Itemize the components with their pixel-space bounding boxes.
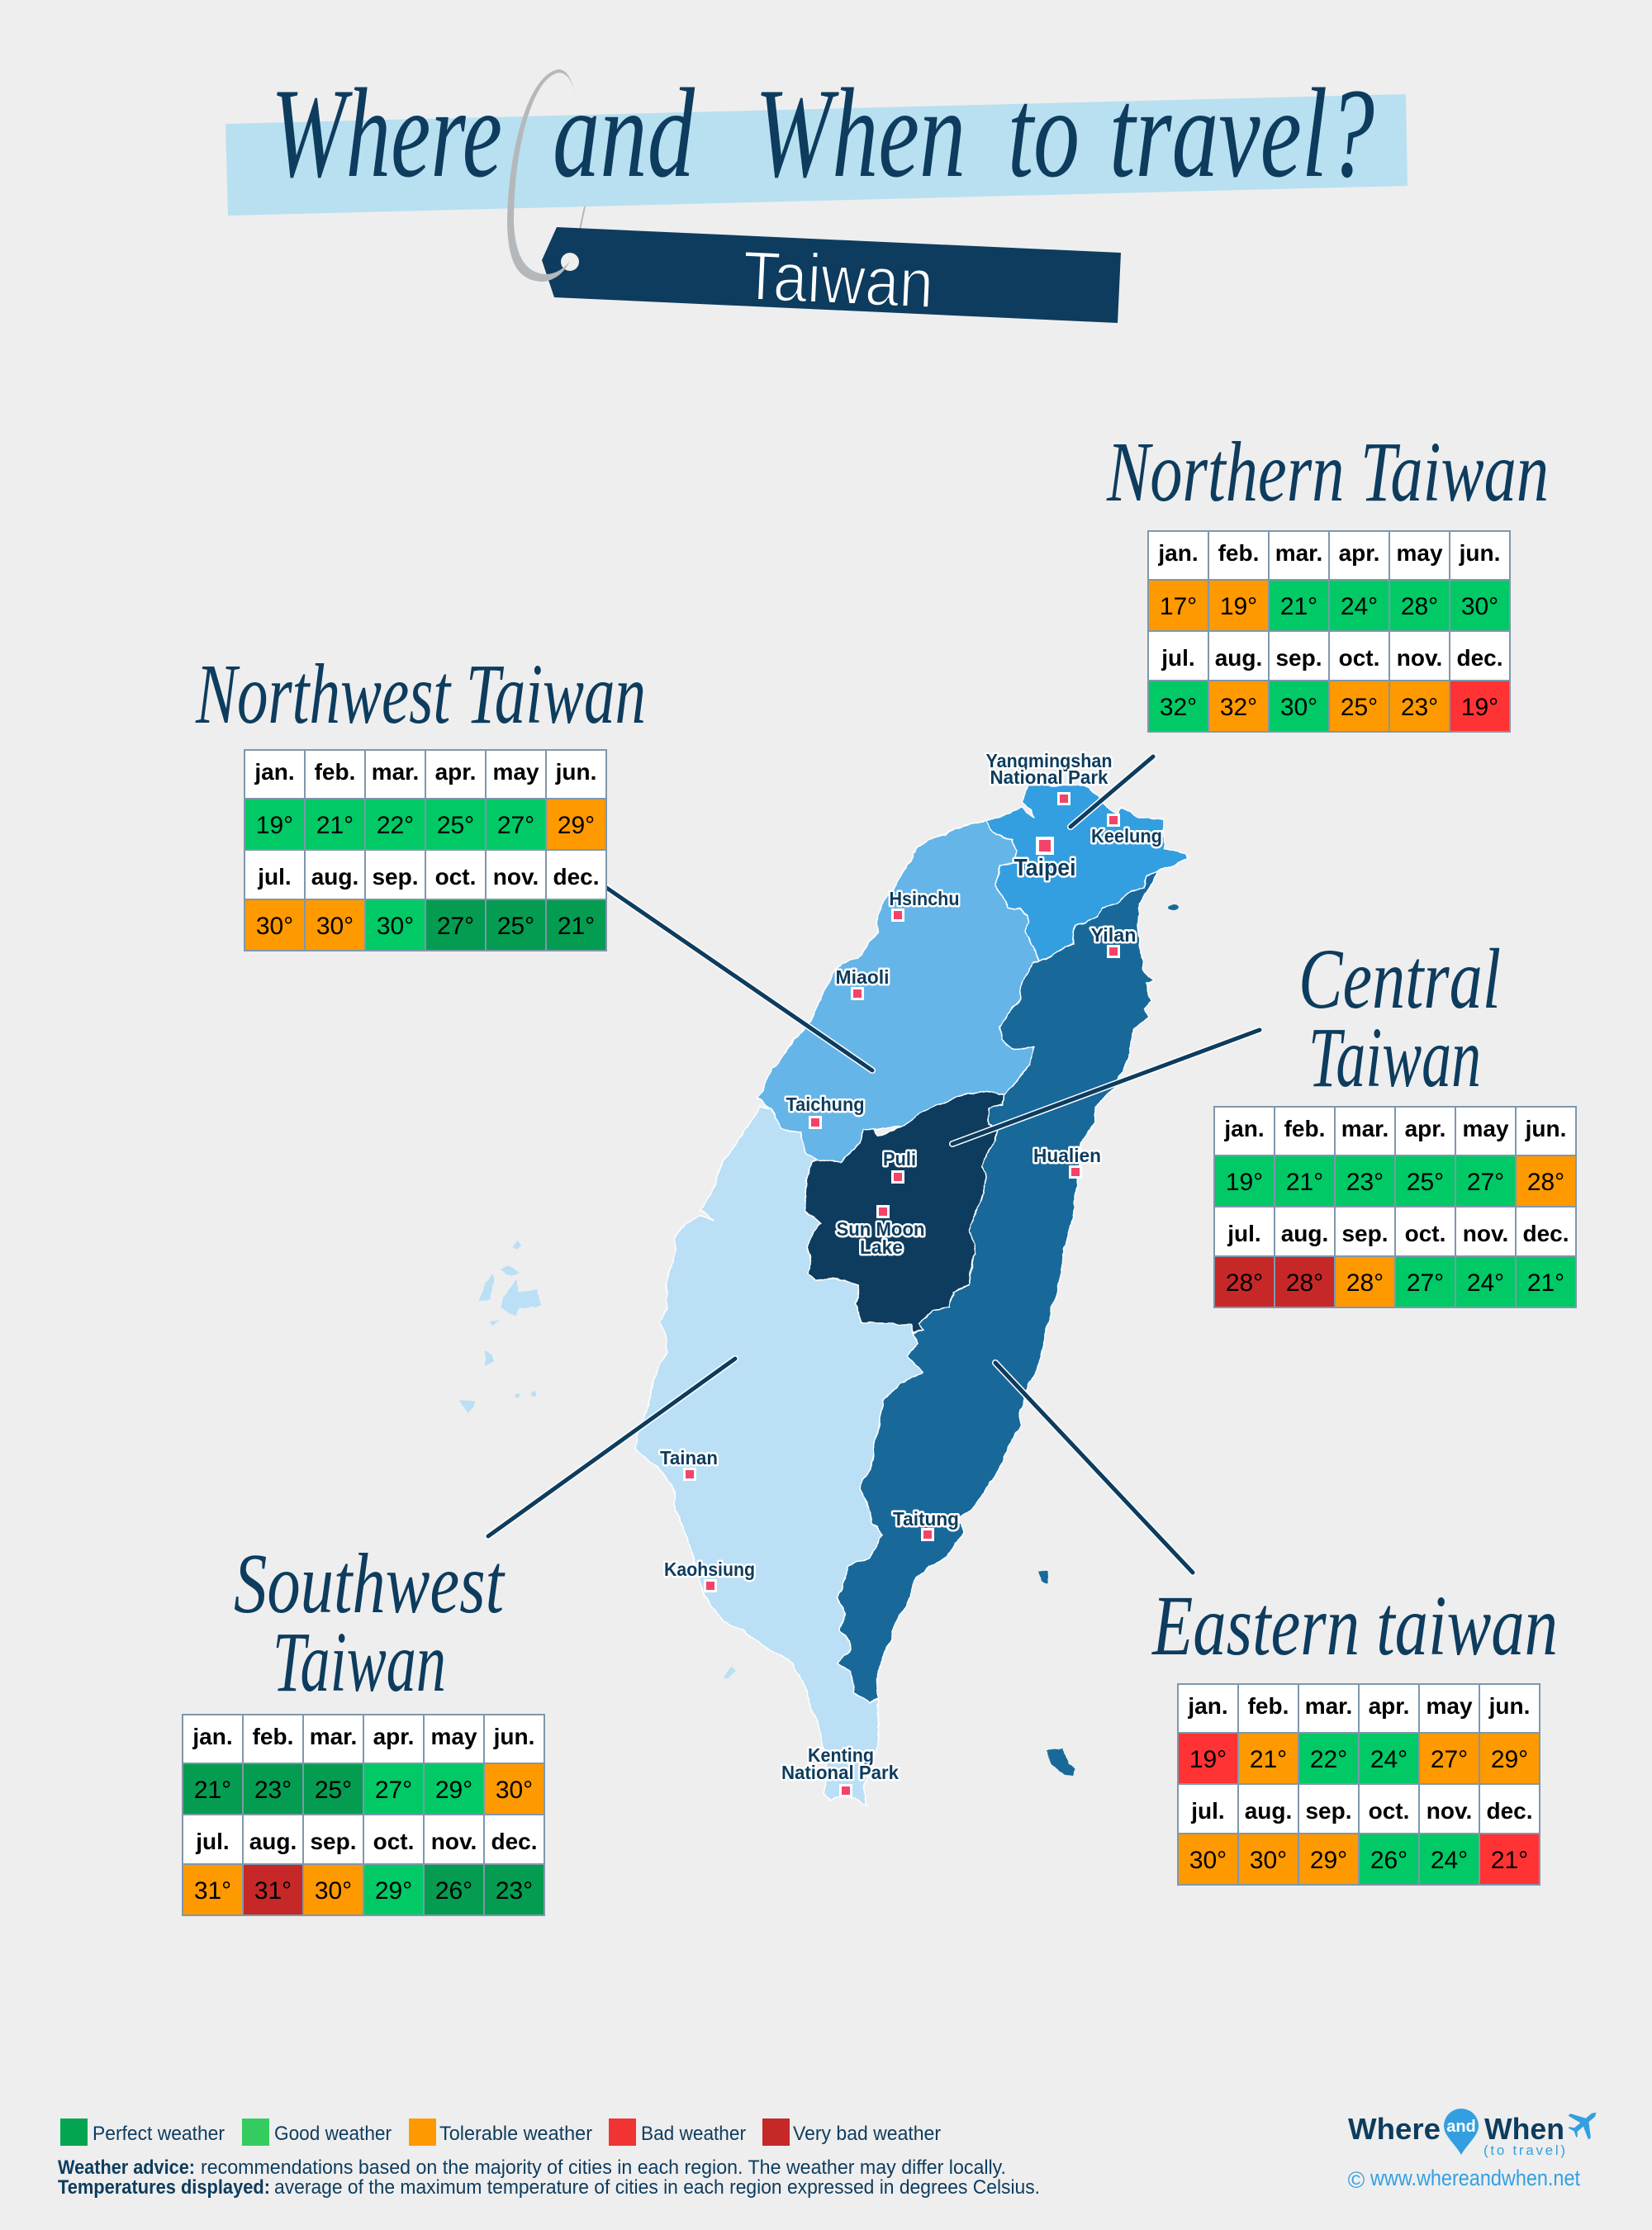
city: Miaoli bbox=[836, 966, 889, 1000]
table: Northwest Taiwan temperatures: sep. bbox=[372, 864, 419, 890]
table: Northwest Taiwan temperatures bbox=[244, 750, 606, 951]
legend item: bad weather bbox=[609, 2118, 746, 2146]
table: Southwest Taiwan temperatures: 21° bbox=[194, 1777, 231, 1804]
city: Sun Moon Lake: Sun Moon bbox=[836, 1218, 925, 1240]
city: Sun Moon Lake: Lake bbox=[860, 1236, 903, 1258]
city: Sun Moon Lake bbox=[836, 1205, 925, 1258]
table: Central Taiwan temperatures: 27° bbox=[1467, 1169, 1504, 1196]
table: Northern Taiwan temperatures: 28° bbox=[1401, 593, 1438, 620]
table: Central Taiwan temperatures: 28° bbox=[1226, 1269, 1263, 1297]
leader line: central Taiwan bbox=[952, 1030, 1260, 1144]
table: Southwest Taiwan temperatures: dec. bbox=[491, 1829, 538, 1854]
table: Central Taiwan temperatures: 21° bbox=[1286, 1169, 1323, 1196]
table: Central Taiwan temperatures: 21° bbox=[1527, 1269, 1564, 1297]
table: Southwest Taiwan temperatures: jul. bbox=[195, 1829, 230, 1854]
heading: Southwest Taiwan: Southwest bbox=[234, 1536, 506, 1631]
legend item: tolerable weather: Tolerable weather bbox=[439, 2123, 592, 2145]
table: Northwest Taiwan temperatures: 21° bbox=[316, 812, 354, 839]
table: Central Taiwan temperatures: 28° bbox=[1286, 1269, 1323, 1297]
table: Central Taiwan temperatures bbox=[1214, 1107, 1576, 1307]
city: Tainan: Tainan bbox=[660, 1447, 718, 1468]
city: Taipei: Taipei bbox=[1014, 855, 1075, 881]
table: Eastern Taiwan temperatures: 29° bbox=[1491, 1746, 1528, 1773]
table: Northern Taiwan temperatures: dec. bbox=[1456, 645, 1503, 671]
table: Northwest Taiwan temperatures: nov. bbox=[493, 864, 539, 890]
heading: Southwest Taiwan bbox=[234, 1536, 506, 1710]
table: Northwest Taiwan temperatures: 27° bbox=[437, 913, 474, 940]
table: Central Taiwan temperatures: 24° bbox=[1467, 1269, 1504, 1297]
islands: Penghu and Liuqiu bbox=[459, 1241, 736, 1679]
table: Eastern Taiwan temperatures: 19° bbox=[1189, 1746, 1227, 1773]
city: Yilan: Yilan bbox=[1090, 924, 1137, 946]
table: Southwest Taiwan temperatures: oct. bbox=[373, 1829, 414, 1854]
website credit: www.whereandwhen.net bbox=[1370, 2166, 1580, 2190]
city: Kaohsiung: Kaohsiung bbox=[664, 1559, 755, 1580]
city: Yangmingshan National Park bbox=[986, 750, 1112, 805]
panel: Eastern Taiwan bbox=[1151, 1578, 1558, 1885]
table: Central Taiwan temperatures: nov. bbox=[1463, 1221, 1508, 1246]
city: Taipei bbox=[1014, 837, 1075, 881]
table: Northwest Taiwan temperatures: 22° bbox=[377, 812, 414, 839]
logo: Where and When to travel: When bbox=[1484, 2112, 1564, 2146]
table: Northern Taiwan temperatures: 23° bbox=[1401, 694, 1438, 721]
table: Northwest Taiwan temperatures: 25° bbox=[497, 913, 534, 940]
table: Central Taiwan temperatures: may bbox=[1462, 1116, 1509, 1141]
title bbox=[271, 62, 1374, 204]
islands: Green Island, Orchid Island, Turtle Island bbox=[1037, 905, 1177, 1776]
table: Northern Taiwan temperatures: nov. bbox=[1397, 645, 1442, 671]
logo: Where and When to travel: and bbox=[1446, 2118, 1476, 2136]
region: northwest Taiwan bbox=[757, 820, 1039, 1163]
city: Hsinchu: Hsinchu bbox=[889, 888, 960, 909]
table: Central Taiwan temperatures: oct. bbox=[1405, 1221, 1446, 1246]
table: Northwest Taiwan temperatures: 25° bbox=[437, 812, 474, 839]
table: Southwest Taiwan temperatures: aug. bbox=[249, 1829, 297, 1854]
panel: Northern Taiwan bbox=[1106, 425, 1549, 732]
table: Northern Taiwan temperatures: 19° bbox=[1461, 694, 1498, 721]
table: Central Taiwan temperatures: jul. bbox=[1227, 1221, 1261, 1246]
table: Eastern Taiwan temperatures: may bbox=[1426, 1693, 1473, 1719]
tag with country name: Taiwan bbox=[741, 236, 935, 322]
table: Central Taiwan temperatures: 25° bbox=[1407, 1169, 1444, 1196]
tag string behind bbox=[580, 206, 585, 230]
region: central Taiwan bbox=[805, 1091, 1004, 1334]
table: Southwest Taiwan temperatures: 30° bbox=[496, 1777, 533, 1804]
table: Eastern Taiwan temperatures: 26° bbox=[1370, 1847, 1408, 1874]
table: Northern Taiwan temperatures: 19° bbox=[1220, 593, 1257, 620]
city: Yangmingshan National Park: Yangmingshan bbox=[986, 750, 1112, 771]
table: Eastern Taiwan temperatures: 21° bbox=[1250, 1746, 1287, 1773]
table: Southwest Taiwan temperatures: 30° bbox=[315, 1877, 352, 1905]
table: Northwest Taiwan temperatures: jun. bbox=[555, 759, 596, 785]
table: Northern Taiwan temperatures: jan. bbox=[1157, 540, 1199, 566]
table: Northern Taiwan temperatures: 30° bbox=[1461, 593, 1498, 620]
table: Central Taiwan temperatures: aug. bbox=[1281, 1221, 1328, 1246]
panel: Southwest Taiwan bbox=[183, 1536, 544, 1915]
table: Northern Taiwan temperatures: 32° bbox=[1160, 694, 1197, 721]
map of Taiwan bbox=[459, 785, 1189, 1806]
table: Eastern Taiwan temperatures: 30° bbox=[1250, 1847, 1287, 1874]
city: Keelung bbox=[1091, 814, 1162, 847]
table: Northern Taiwan temperatures: jul. bbox=[1161, 645, 1195, 671]
legend item: very bad weather bbox=[762, 2118, 941, 2146]
table: Northern Taiwan temperatures: may bbox=[1396, 540, 1443, 566]
table: Central Taiwan temperatures: apr. bbox=[1405, 1116, 1446, 1141]
table: Northwest Taiwan temperatures: may bbox=[492, 759, 539, 785]
table: Southwest Taiwan temperatures: mar. bbox=[310, 1724, 357, 1749]
city: Hualien bbox=[1033, 1145, 1101, 1179]
temperatures note: Temperatures displayed: bbox=[58, 2176, 270, 2199]
table: Northern Taiwan temperatures: 30° bbox=[1280, 694, 1317, 721]
city: Taichung bbox=[786, 1094, 864, 1129]
heading: Central Taiwan: Central bbox=[1298, 932, 1501, 1027]
table: Northwest Taiwan temperatures: 30° bbox=[377, 913, 414, 940]
table: Northern Taiwan temperatures: sep. bbox=[1275, 645, 1322, 671]
table: Central Taiwan temperatures: jan. bbox=[1223, 1116, 1265, 1141]
region: northern Taiwan bbox=[985, 785, 1189, 961]
table: Northern Taiwan temperatures: oct. bbox=[1339, 645, 1379, 671]
table: Southwest Taiwan temperatures: sep. bbox=[310, 1829, 357, 1854]
panel: Central Taiwan bbox=[1214, 932, 1576, 1307]
city: Puli: Puli bbox=[883, 1148, 916, 1170]
title: and bbox=[553, 62, 695, 204]
table: Eastern Taiwan temperatures: 29° bbox=[1310, 1847, 1347, 1874]
website credit: © bbox=[1348, 2167, 1365, 2193]
legend item: tolerable weather bbox=[409, 2118, 592, 2146]
table: Northern Taiwan temperatures bbox=[1148, 531, 1510, 732]
city: Miaoli: Miaoli bbox=[836, 966, 889, 988]
table: Northwest Taiwan temperatures: 30° bbox=[256, 913, 293, 940]
table: Eastern Taiwan temperatures: apr. bbox=[1369, 1693, 1409, 1719]
city: Tainan bbox=[660, 1447, 718, 1481]
tag with country name bbox=[542, 227, 1121, 323]
title: When bbox=[755, 62, 966, 204]
table: Northwest Taiwan temperatures: feb. bbox=[315, 759, 355, 785]
city: Taitung: Taitung bbox=[893, 1508, 959, 1530]
table: Northwest Taiwan temperatures: 27° bbox=[497, 812, 534, 839]
title: travel? bbox=[1109, 62, 1374, 204]
table: Eastern Taiwan temperatures: sep. bbox=[1305, 1798, 1352, 1824]
table: Eastern Taiwan temperatures: 27° bbox=[1431, 1746, 1468, 1773]
table: Eastern Taiwan temperatures: 30° bbox=[1189, 1847, 1227, 1874]
table: Northwest Taiwan temperatures: dec. bbox=[553, 864, 600, 890]
city: Kenting National Park bbox=[781, 1744, 899, 1797]
region: southwest Taiwan bbox=[634, 1106, 923, 1806]
table: Central Taiwan temperatures: 28° bbox=[1346, 1269, 1384, 1297]
table: Eastern Taiwan temperatures: mar. bbox=[1305, 1693, 1352, 1719]
table: Southwest Taiwan temperatures: nov. bbox=[431, 1829, 477, 1854]
table: Southwest Taiwan temperatures: 27° bbox=[375, 1777, 412, 1804]
city: Hualien: Hualien bbox=[1033, 1145, 1101, 1166]
leader line: southwest Taiwan bbox=[488, 1359, 735, 1536]
table: Southwest Taiwan temperatures: 25° bbox=[315, 1777, 352, 1804]
table: Northern Taiwan temperatures: aug. bbox=[1215, 645, 1262, 671]
table: Eastern Taiwan temperatures: jun. bbox=[1488, 1693, 1530, 1719]
city: Keelung: Keelung bbox=[1091, 825, 1162, 847]
region: eastern Taiwan bbox=[838, 865, 1174, 1702]
leader line: northern Taiwan bbox=[1070, 757, 1153, 827]
table: Northern Taiwan temperatures: 17° bbox=[1160, 593, 1197, 620]
table: Central Taiwan temperatures: sep. bbox=[1341, 1221, 1389, 1246]
city: Hsinchu bbox=[889, 888, 960, 922]
legend bbox=[60, 2118, 941, 2146]
heading: Central Taiwan: Taiwan bbox=[1308, 1010, 1481, 1105]
legend item: bad weather: Bad weather bbox=[641, 2123, 746, 2145]
heading: Central Taiwan bbox=[1298, 932, 1501, 1105]
city: Puli bbox=[883, 1148, 916, 1184]
city: Kaohsiung bbox=[664, 1559, 755, 1592]
table: Northwest Taiwan temperatures: 19° bbox=[256, 812, 293, 839]
temperatures note: average of the maximum temperature of cities in each region expressed in degrees Celsius. bbox=[274, 2176, 1040, 2199]
table: Southwest Taiwan temperatures: may bbox=[430, 1724, 477, 1749]
title: to bbox=[1008, 62, 1080, 204]
logo: Where and When to travel: Where bbox=[1348, 2112, 1441, 2146]
legend item: perfect weather bbox=[60, 2118, 225, 2146]
table: Northern Taiwan temperatures: mar. bbox=[1275, 540, 1322, 566]
table: Northwest Taiwan temperatures: jul. bbox=[257, 864, 292, 890]
table: Eastern Taiwan temperatures bbox=[1178, 1684, 1540, 1885]
city: Yangmingshan National Park: National Park bbox=[990, 766, 1108, 788]
table: Eastern Taiwan temperatures: 22° bbox=[1310, 1746, 1347, 1773]
table: Central Taiwan temperatures: mar. bbox=[1341, 1116, 1389, 1141]
table: Southwest Taiwan temperatures bbox=[183, 1715, 544, 1915]
table: Eastern Taiwan temperatures: aug. bbox=[1245, 1798, 1292, 1824]
table: Southwest Taiwan temperatures: 31° bbox=[194, 1877, 231, 1905]
table: Southwest Taiwan temperatures: jan. bbox=[192, 1724, 233, 1749]
city: Taichung: Taichung bbox=[786, 1094, 864, 1115]
table: Eastern Taiwan temperatures: jul. bbox=[1190, 1798, 1225, 1824]
table: Central Taiwan temperatures: dec. bbox=[1522, 1221, 1569, 1246]
city: Yilan bbox=[1090, 924, 1137, 958]
table: Northwest Taiwan temperatures: apr. bbox=[435, 759, 476, 785]
city: Taitung bbox=[893, 1508, 959, 1541]
table: Central Taiwan temperatures: feb. bbox=[1284, 1116, 1325, 1141]
panel: Northwest Taiwan bbox=[195, 647, 646, 951]
table: Central Taiwan temperatures: jun. bbox=[1525, 1116, 1566, 1141]
table: Eastern Taiwan temperatures: nov. bbox=[1427, 1798, 1472, 1824]
table: Northern Taiwan temperatures: 32° bbox=[1220, 694, 1257, 721]
table: Northwest Taiwan temperatures: mar. bbox=[372, 759, 419, 785]
table: Northern Taiwan temperatures: feb. bbox=[1218, 540, 1259, 566]
table: Southwest Taiwan temperatures: 29° bbox=[435, 1777, 472, 1804]
table: Central Taiwan temperatures: 23° bbox=[1346, 1169, 1384, 1196]
leader line: eastern Taiwan bbox=[995, 1363, 1193, 1573]
legend item: good weather bbox=[242, 2118, 392, 2146]
table: Northern Taiwan temperatures: 25° bbox=[1341, 694, 1378, 721]
table: Eastern Taiwan temperatures: 24° bbox=[1431, 1847, 1468, 1874]
leader line: northwest Taiwan bbox=[605, 887, 872, 1070]
table: Northwest Taiwan temperatures: jan. bbox=[254, 759, 295, 785]
table: Southwest Taiwan temperatures: 23° bbox=[496, 1877, 533, 1905]
table: Southwest Taiwan temperatures: apr. bbox=[373, 1724, 414, 1749]
table: Southwest Taiwan temperatures: 26° bbox=[435, 1877, 472, 1905]
title: Where bbox=[271, 62, 502, 204]
table: Southwest Taiwan temperatures: 29° bbox=[375, 1877, 412, 1905]
legend item: perfect weather: Perfect weather bbox=[93, 2123, 225, 2145]
table: Northwest Taiwan temperatures: 29° bbox=[558, 812, 595, 839]
title banner bbox=[225, 94, 1408, 216]
weather advice note: recommendations based on the majority of cities in each region. The weather may differ locally. bbox=[201, 2156, 1006, 2179]
table: Southwest Taiwan temperatures: 23° bbox=[254, 1777, 292, 1804]
heading: Northwest Taiwan: Northwest Taiwan bbox=[195, 647, 646, 742]
tag string loop bbox=[507, 69, 577, 282]
logo: Where and When to travel bbox=[1348, 2100, 1607, 2158]
table: Northwest Taiwan temperatures: aug. bbox=[311, 864, 358, 890]
weather advice note: Weather advice: bbox=[58, 2156, 195, 2179]
table: Northwest Taiwan temperatures: oct. bbox=[435, 864, 476, 890]
city: Kenting National Park: National Park bbox=[781, 1762, 899, 1783]
table: Central Taiwan temperatures: 28° bbox=[1527, 1169, 1564, 1196]
legend item: very bad weather: Very bad weather bbox=[793, 2123, 941, 2145]
table: Northwest Taiwan temperatures: 30° bbox=[316, 913, 354, 940]
table: Northern Taiwan temperatures: 24° bbox=[1341, 593, 1378, 620]
table: Southwest Taiwan temperatures: 31° bbox=[254, 1877, 292, 1905]
heading: Southwest Taiwan: Taiwan bbox=[273, 1615, 446, 1710]
table: Northern Taiwan temperatures: apr. bbox=[1339, 540, 1379, 566]
table: Northwest Taiwan temperatures: 21° bbox=[558, 913, 595, 940]
table: Central Taiwan temperatures: 19° bbox=[1226, 1169, 1263, 1196]
table: Southwest Taiwan temperatures: jun. bbox=[493, 1724, 534, 1749]
table: Northern Taiwan temperatures: 21° bbox=[1280, 593, 1317, 620]
table: Southwest Taiwan temperatures: feb. bbox=[253, 1724, 293, 1749]
table: Eastern Taiwan temperatures: jan. bbox=[1187, 1693, 1228, 1719]
city: Kenting National Park: Kenting bbox=[808, 1744, 874, 1766]
table: Eastern Taiwan temperatures: dec. bbox=[1486, 1798, 1533, 1824]
table: Eastern Taiwan temperatures: 24° bbox=[1370, 1746, 1408, 1773]
table: Northern Taiwan temperatures: jun. bbox=[1459, 540, 1500, 566]
table: Central Taiwan temperatures: 27° bbox=[1407, 1269, 1444, 1297]
table: Eastern Taiwan temperatures: oct. bbox=[1369, 1798, 1409, 1824]
legend item: good weather: Good weather bbox=[274, 2123, 392, 2145]
table: Eastern Taiwan temperatures: 21° bbox=[1491, 1847, 1528, 1874]
logo: Where and When to travel: (to travel) bbox=[1483, 2142, 1565, 2158]
table: Eastern Taiwan temperatures: feb. bbox=[1248, 1693, 1289, 1719]
